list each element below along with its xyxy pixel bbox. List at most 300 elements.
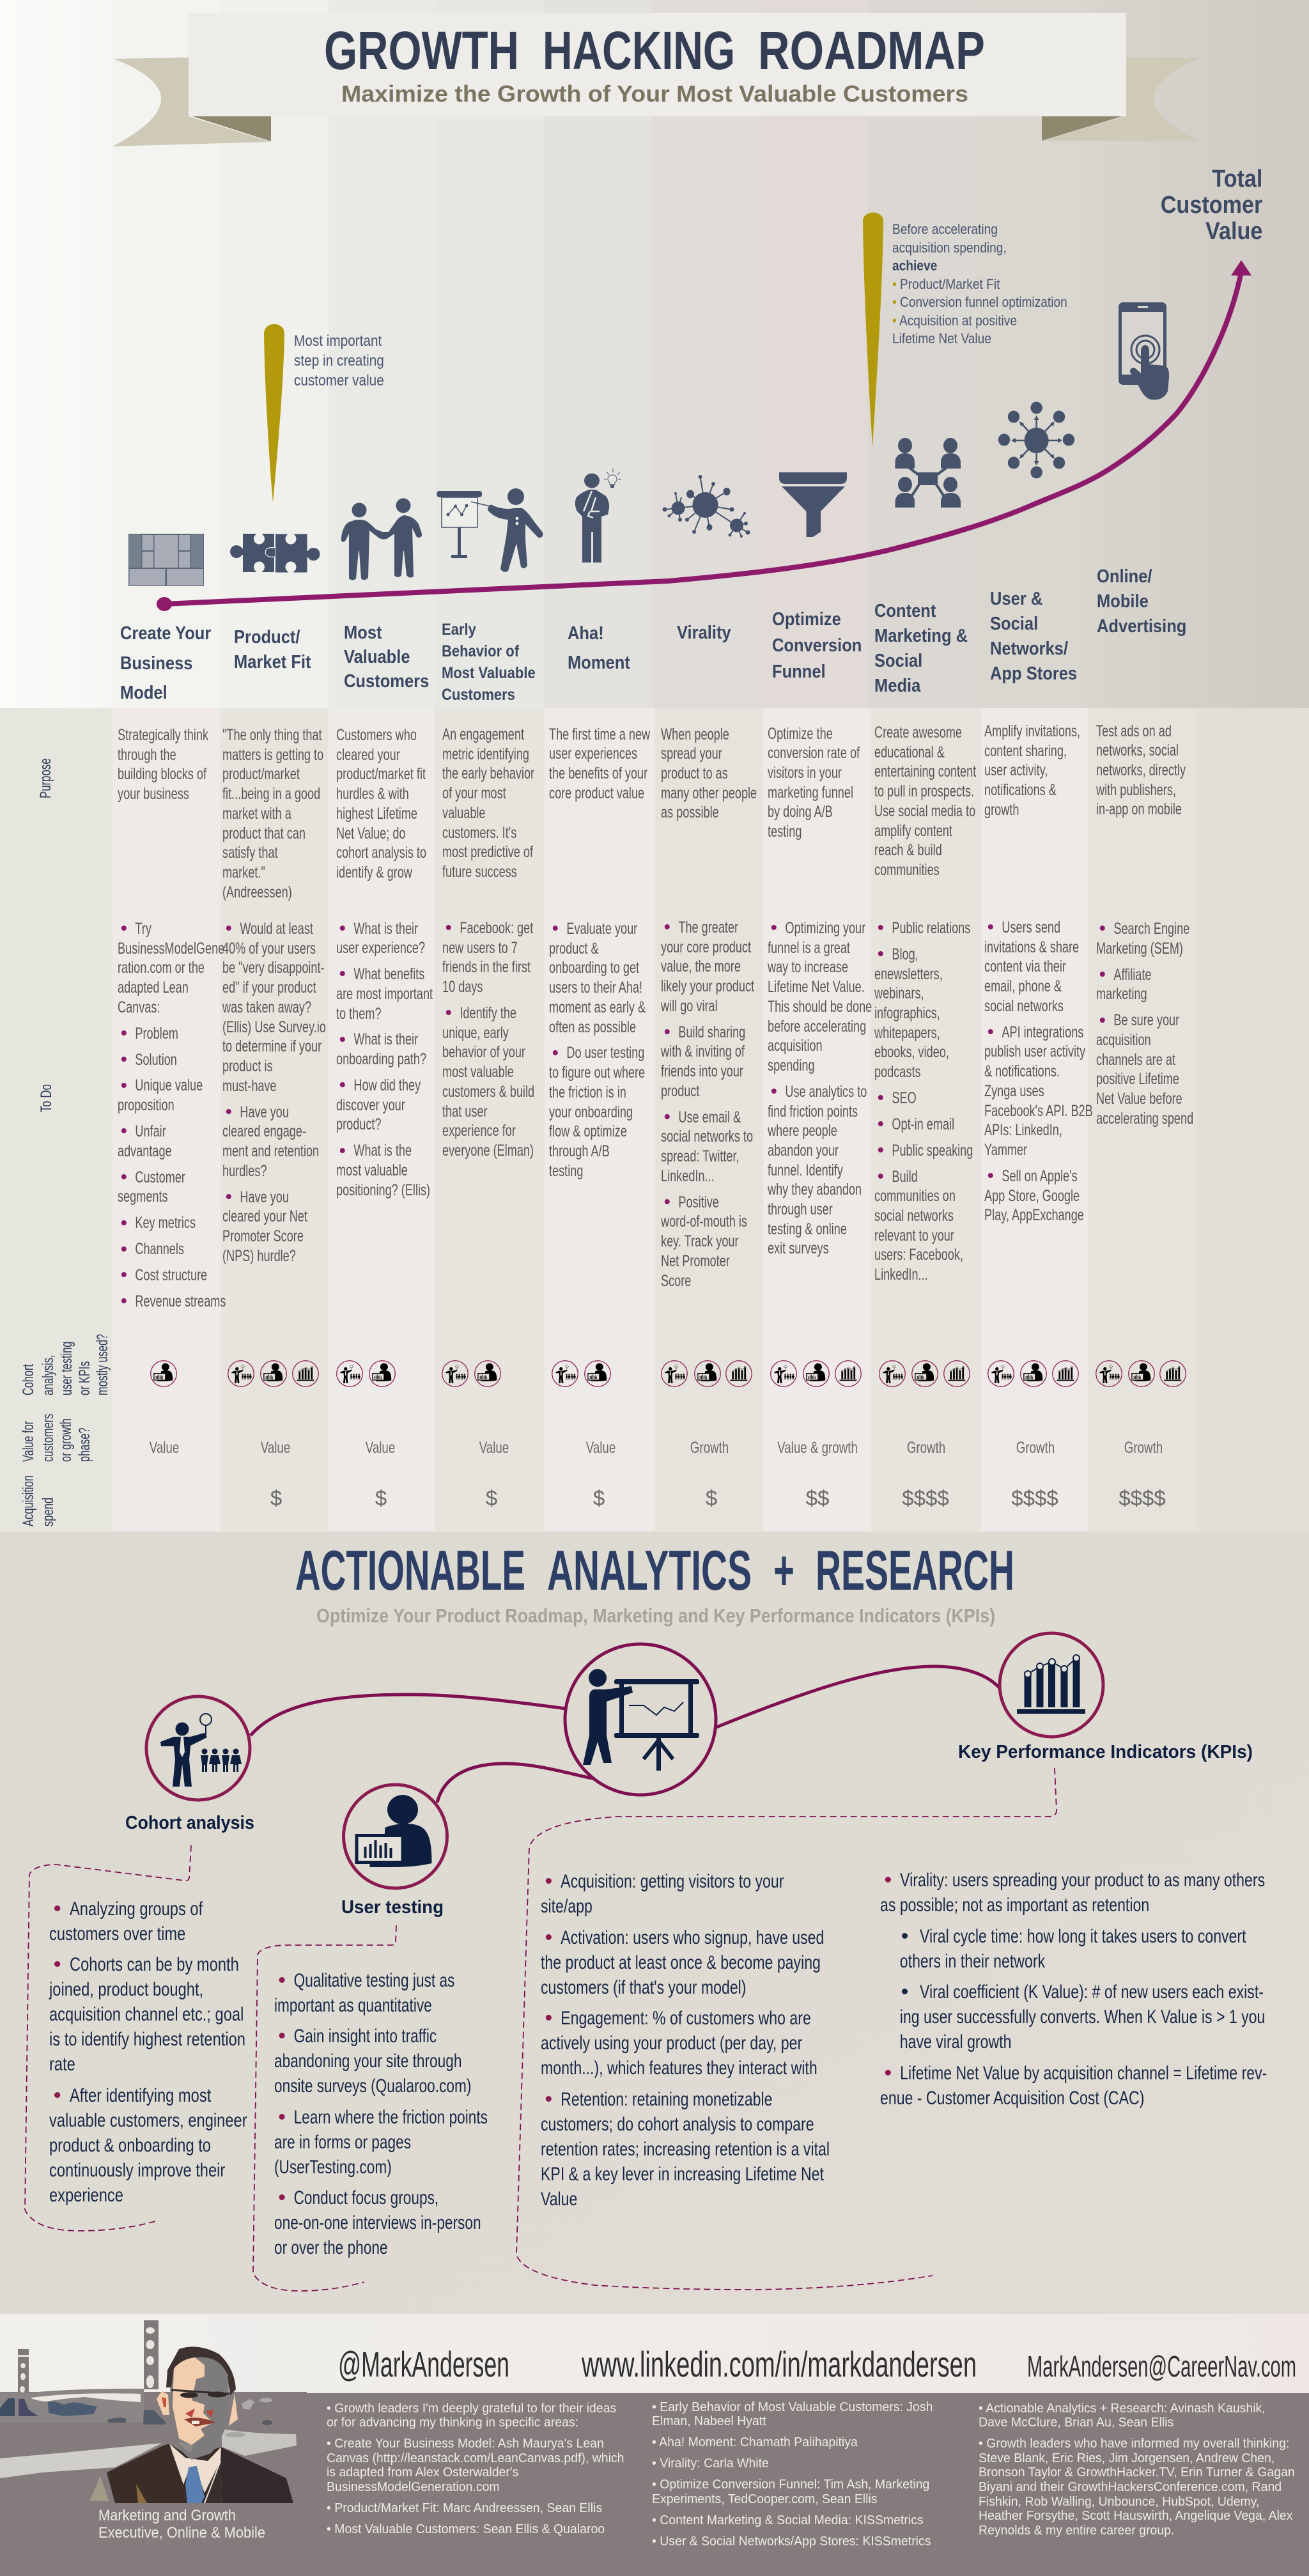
text: KPI bullets left: Value	[541, 2189, 577, 2210]
column 8 purpose: to pull in prospects.	[874, 782, 974, 800]
column 9 to do: social networks	[984, 997, 1064, 1015]
column 9 to do: Yammer	[984, 1141, 1027, 1159]
column 5 purpose: core product value	[549, 784, 644, 802]
column 6 to do: social networks to	[661, 1128, 753, 1145]
column 6 to do	[661, 919, 754, 1290]
heading: early behavior	[442, 621, 536, 704]
column 5 to do: the friction is in	[549, 1083, 626, 1101]
column 2 to do: Have you	[240, 1188, 288, 1206]
column 6 to do: LinkedIn...	[661, 1167, 715, 1185]
credits column 2: • Content Marketing & Social Media: KISSmetrics	[652, 2513, 924, 2527]
text: KPI bullets left: actively using your product (per day, per	[541, 2033, 802, 2054]
column 4 to do: Facebook: get	[460, 919, 533, 937]
text: cohort analysis bullets: Cohorts can be by month	[70, 1954, 239, 1975]
row label: tools used: Cohort	[20, 1364, 37, 1395]
column 8 to do: webinars,	[874, 984, 924, 1002]
column 7 purpose: by doing A/B	[768, 803, 833, 821]
column 2 purpose: product that can	[222, 825, 305, 842]
column 5 to do: to figure out where	[549, 1064, 645, 1082]
column 2 to do: product is	[222, 1057, 272, 1075]
heading: user and social networks	[990, 588, 1077, 684]
column 6 purpose	[661, 725, 757, 821]
heading: online mobile advertising	[1097, 566, 1186, 637]
dashed callout: cohort	[25, 1845, 191, 2231]
column 6 to do: likely your product	[661, 977, 754, 995]
caption: author title: Marketing and Growth	[98, 2507, 236, 2524]
heading: optimize conversion funnel: Funnel	[772, 661, 826, 681]
tool icons row	[151, 1361, 1186, 1386]
text: user testing bullets: Gain insight into traffic	[293, 2026, 437, 2047]
column 6 to do: your core product	[661, 938, 751, 956]
dashed callout: user testing	[253, 1925, 396, 2291]
column 7 to do: testing & online	[768, 1220, 847, 1238]
heading: user and social networks: User &	[990, 588, 1042, 609]
column 3 to do: are most important	[336, 985, 433, 1003]
column 10 to do: accelerating spend	[1096, 1110, 1193, 1128]
subheading: Optimize Your Product Roadmap, Marketing and Key Performance Indicators (KPIs)	[316, 1604, 995, 1627]
text: KPI bullets right: have viral growth	[900, 2031, 1011, 2052]
column 10 to do: Net Value before	[1096, 1090, 1182, 1108]
text: cohort analysis bullets: Analyzing groups of	[70, 1898, 203, 1919]
column 4 purpose: future success	[442, 863, 517, 881]
heading: online mobile advertising: Mobile	[1097, 591, 1149, 611]
callout: before accelerating acquisition: • Acquisition at positive	[892, 312, 1017, 329]
column 3 purpose: Net Value; do	[336, 825, 405, 842]
text: cohort analysis bullets: product & onboarding to	[49, 2135, 211, 2156]
credits column 3: Dave McClure, Brian Au, Sean Ellis	[979, 2415, 1173, 2430]
row label: acquisition spend: Acquisition	[20, 1475, 37, 1526]
text: user testing bullets: Conduct focus groups,	[293, 2187, 438, 2208]
column 5 purpose: The first time a new	[549, 725, 650, 743]
label: user testing: User testing	[341, 1897, 444, 1918]
heading: user and social networks: App Stores	[990, 663, 1077, 684]
callout: before accelerating acquisition	[892, 221, 1067, 346]
column 7 to do: way to increase	[768, 958, 848, 976]
ribbon: right tail	[1042, 58, 1200, 141]
column 4 to do: everyone (Elman)	[442, 1142, 534, 1160]
credits column 1: • Growth leaders I'm deeply grateful to for their ideas	[327, 2401, 616, 2416]
value row: Value	[261, 1439, 290, 1457]
credits column 1: BusinessModelGeneration.com	[327, 2479, 500, 2494]
column 1 to do: Canvas:	[118, 998, 160, 1016]
row label: value or growth: or growth	[58, 1418, 75, 1462]
column 3 purpose: hurdles & with	[336, 785, 409, 803]
column 2 purpose: fit...being in a good	[222, 785, 320, 803]
column 2 to do: to determine if your	[222, 1037, 321, 1055]
illustration: portrait of Mark Andersen	[89, 2347, 293, 2503]
heading: ANALYTICS	[547, 1539, 752, 1602]
column 2 purpose: market."	[222, 864, 265, 881]
spend row: $	[270, 1486, 282, 1510]
column 8 to do: users: Facebook,	[874, 1246, 963, 1264]
callout: before accelerating acquisition: • Product/Market Fit	[892, 276, 1000, 291]
column 6 to do: Score	[661, 1272, 691, 1290]
column 5 to do	[549, 920, 646, 1180]
column 2 to do: ed" if your product	[222, 979, 316, 997]
column 4 purpose: metric identifying	[442, 745, 529, 763]
column 7 purpose	[768, 725, 860, 841]
text: KPI bullets right: as possible; not as important as retention	[880, 1895, 1149, 1916]
callout: before accelerating acquisition: Lifetime Net Value	[892, 330, 991, 346]
column 1 to do: Solution	[135, 1051, 176, 1069]
text: user testing bullets: one-on-one interviews in-person	[274, 2212, 481, 2233]
credits column 1: is adapted from Alex Osterwalder's	[327, 2465, 518, 2479]
title: ROADMAP	[758, 20, 985, 81]
panel: hero roadmap	[0, 0, 1309, 708]
column 3 to do: discover your	[336, 1096, 405, 1114]
column 10 purpose: Test ads on ad	[1096, 722, 1172, 740]
column 6 to do: friends into your	[661, 1062, 743, 1080]
heading: content marketing: Social	[874, 651, 922, 671]
column 4 to do: experience for	[442, 1122, 516, 1140]
column 1 purpose: through the	[118, 746, 176, 764]
column 8 to do: podcasts	[874, 1063, 921, 1081]
text: KPI bullets left: site/app	[541, 1896, 593, 1917]
row label: to do: To Do	[38, 1084, 55, 1112]
column 8 to do: whitepapers,	[874, 1024, 940, 1042]
column 2 to do: cleared engage-	[222, 1122, 306, 1140]
credits column 2: Experiments, TedCooper.com, Sean Ellis	[652, 2492, 878, 2506]
connectors	[251, 1666, 1000, 1803]
text: user testing bullets: are in forms or pages	[274, 2132, 411, 2153]
column 8 to do: communities on	[874, 1187, 956, 1205]
column 7 to do: where people	[768, 1122, 837, 1140]
column 9 to do: invitations & share	[984, 938, 1079, 956]
column 9 purpose: content sharing,	[984, 742, 1067, 760]
row label: value or growth: Value for	[20, 1421, 37, 1462]
column 7 to do: funnel is a great	[768, 939, 850, 957]
column 2 purpose: (Andreessen)	[222, 883, 291, 901]
column 3 to do: What is their	[353, 919, 418, 937]
column 1 to do: segments	[118, 1188, 167, 1206]
column 6 to do: The greater	[678, 919, 738, 936]
column 6 to do: Build sharing	[678, 1023, 745, 1041]
column 10 purpose	[1096, 722, 1186, 818]
column 2 purpose: market with a	[222, 805, 291, 823]
column 10 to do	[1096, 920, 1193, 1128]
column 1 to do: Cost structure	[135, 1266, 207, 1284]
subtitle: Maximize the Growth of Your Most Valuable Customers	[341, 81, 968, 107]
icon: funnel	[779, 472, 847, 537]
column 1 purpose	[118, 726, 208, 803]
column 2 purpose: satisfy that	[222, 844, 277, 862]
value row: Value & growth	[777, 1439, 858, 1457]
credits column 2: Elman, Nabeel Hyatt	[652, 2414, 766, 2428]
column 9 to do: Facebook's API. B2B	[984, 1102, 1093, 1120]
icon: phone with tapping hand	[1119, 302, 1169, 400]
title: GROWTH	[324, 20, 519, 81]
text: user testing bullets	[274, 1967, 488, 2267]
heading: optimize conversion funnel: Conversion	[772, 635, 862, 656]
column 8 purpose: reach & build	[874, 841, 942, 859]
heading: optimize conversion funnel: Optimize	[772, 609, 841, 629]
column 9 to do: & notifications.	[984, 1062, 1060, 1080]
callout: before accelerating acquisition: achieve	[892, 258, 937, 274]
column 10 to do: Be sure your	[1113, 1011, 1179, 1029]
text: user testing bullets: Learn where the friction points	[293, 2107, 488, 2128]
heading: create your business model	[120, 623, 211, 703]
text: cohort analysis bullets: rate	[49, 2054, 75, 2075]
callout: before accelerating acquisition: acquisition spending,	[892, 239, 1007, 256]
column 4 to do: customers & build	[442, 1083, 534, 1101]
value row: Value	[150, 1439, 179, 1457]
spend row: $$$$	[1011, 1486, 1058, 1510]
credits column 3: Heather Forsythe, Scott Hauswirth, Angelique Vega, Alex	[979, 2508, 1292, 2523]
column 8 to do: Opt-in email	[892, 1115, 954, 1133]
column 4 to do: Identify the	[460, 1004, 516, 1022]
panel: actionable analytics	[0, 1532, 1309, 2314]
column 7 to do: exit surveys	[768, 1239, 829, 1257]
text: KPI bullets right: others in their network	[900, 1951, 1045, 1972]
heading: content marketing: Marketing &	[874, 625, 968, 646]
text: user testing bullets: (UserTesting.com)	[274, 2157, 391, 2178]
column 7 purpose: Optimize the	[768, 725, 833, 743]
column 10 purpose: networks, social	[1096, 741, 1179, 759]
column 3 purpose: product/market fit	[336, 765, 426, 783]
icon: user testing	[344, 1785, 447, 1888]
column 4 purpose: customers. It's	[442, 824, 516, 842]
row label: acquisition spend: spend	[40, 1498, 57, 1526]
column 2 to do: must-have	[222, 1077, 276, 1095]
text: user testing bullets: important as quantitative	[274, 1994, 431, 2016]
column 5 to do: Evaluate your	[566, 920, 637, 938]
icon: presenter hub	[565, 1644, 716, 1795]
column 10 purpose: networks, directly	[1096, 761, 1186, 779]
heading: online mobile advertising: Online/	[1097, 566, 1152, 587]
column 8 to do: Public relations	[892, 919, 970, 937]
row label: tools used: analysis,	[40, 1355, 57, 1395]
text: user testing bullets: abandoning your site through	[274, 2051, 461, 2072]
column 6 to do: Use email &	[678, 1108, 741, 1126]
column 5 purpose: the benefits of your	[549, 764, 647, 782]
callout: most important step: Most important	[294, 332, 382, 349]
column 1 to do: Key metrics	[135, 1214, 196, 1232]
text: KPI bullets right: enue - Customer Acquisition Cost (CAC)	[880, 2088, 1144, 2109]
column 8 to do	[874, 919, 973, 1284]
column 6 purpose: When people	[661, 725, 729, 743]
column 9 to do: APIs: LinkedIn,	[984, 1121, 1062, 1139]
value row: Value	[479, 1439, 509, 1457]
icon: puzzle pieces	[230, 532, 320, 573]
text: KPI bullets left: customers (if that's your model)	[541, 1977, 746, 1998]
column 4 purpose: of your most	[442, 784, 506, 802]
callout: most important step: step in creating	[294, 352, 384, 369]
text: KPI bullets right	[880, 1868, 1267, 2116]
row label: value or growth: phase?	[76, 1427, 93, 1462]
column 2 to do: Would at least	[240, 920, 313, 938]
column 4 to do	[442, 919, 534, 1160]
icon: presenter at board	[437, 488, 543, 572]
text: KPI bullets right: Virality: users spreading your product to as many others	[900, 1870, 1265, 1891]
column 6 to do: Net Promoter	[661, 1252, 730, 1270]
credits column 3: Fishkin, Rob Walling, Unbounce, HubSpot, Udemy,	[979, 2494, 1259, 2509]
column 1 to do: adapted Lean	[118, 979, 188, 997]
column 5 to do: onboarding to get	[549, 959, 639, 977]
value row	[150, 1439, 1163, 1457]
spend row: $$	[806, 1486, 829, 1510]
column 4 purpose: most predictive of	[442, 843, 533, 861]
column 5 to do: Do user testing	[566, 1044, 644, 1062]
column 1 to do: advantage	[118, 1142, 171, 1160]
label: total customer value: Total	[1212, 165, 1262, 192]
heading: create your business model: Create Your	[120, 623, 211, 644]
column 7 to do: acquisition	[768, 1037, 823, 1055]
column 8 purpose: educational &	[874, 743, 945, 761]
column 6 to do: Positive	[678, 1193, 719, 1211]
column 9 to do: content via their	[984, 958, 1066, 975]
column 1 to do: Channels	[135, 1240, 183, 1258]
column 1 to do: Try	[135, 920, 151, 938]
column 8 to do: Blog,	[892, 945, 918, 963]
heading: product market fit	[234, 626, 311, 672]
heading: online mobile advertising: Advertising	[1097, 616, 1186, 637]
column 8 to do: LinkedIn...	[874, 1266, 928, 1284]
value row: Value	[366, 1439, 395, 1457]
column 8 to do: social networks	[874, 1207, 954, 1225]
column 4 to do: friends in the first	[442, 958, 531, 976]
heading: optimize conversion funnel	[772, 609, 862, 681]
credits column 1: • Create Your Business Model: Ash Maurya's Lean	[327, 2436, 604, 2451]
text: KPI bullets left: customers; do cohort analysis to compare	[541, 2114, 814, 2135]
column 5 purpose	[549, 725, 651, 802]
heading: most valuable customers: Customers	[344, 671, 429, 692]
credits column 1: or for advancing my thinking in specific areas:	[327, 2415, 578, 2430]
heading: aha moment: Moment	[568, 653, 630, 673]
caption: author title	[98, 2507, 265, 2541]
pin: most important step	[264, 324, 284, 502]
callout: most important step: customer value	[294, 372, 384, 389]
column 4 to do: new users to 7	[442, 939, 518, 957]
text: cohort analysis bullets: experience	[49, 2185, 123, 2206]
column 5 to do: testing	[549, 1162, 583, 1180]
credits column 2	[652, 2400, 933, 2556]
column 2 purpose: matters is getting to	[222, 746, 323, 764]
heading: +	[773, 1539, 794, 1602]
text: cohort analysis bullets: After identifying most	[70, 2085, 211, 2106]
column 3 to do: positioning? (Ellis)	[336, 1181, 430, 1199]
credits column 1	[327, 2401, 624, 2543]
spend row: $$$$	[1119, 1486, 1166, 1510]
icon: cohort analysis	[146, 1696, 250, 1800]
text: cohort analysis bullets: customers over time	[49, 1923, 185, 1944]
text: cohort analysis bullets: joined, product bought,	[49, 1979, 203, 2000]
column 7 purpose: conversion rate of	[768, 744, 860, 762]
column 3 to do: What is the	[353, 1142, 412, 1160]
icon: KPI chart	[1000, 1633, 1103, 1737]
credits column 3	[979, 2401, 1295, 2545]
contact: twitter: @MarkAndersen	[338, 2344, 509, 2384]
column 4 to do: 10 days	[442, 978, 483, 996]
column 9 to do: App Store, Google	[984, 1187, 1080, 1205]
column 1 to do: Customer	[135, 1168, 185, 1186]
icon: virality network	[663, 476, 749, 537]
column 2 to do: Promoter Score	[222, 1227, 303, 1245]
column 1 to do: Problem	[135, 1025, 178, 1043]
text: KPI bullets left: retention rates; increasing retention is a vital	[541, 2139, 830, 2160]
column 5 to do: flow & optimize	[549, 1122, 627, 1140]
column 7 to do: funnel. Identify	[768, 1161, 843, 1179]
column 3 purpose: identify & grow	[336, 864, 412, 881]
text: KPI bullets left: Retention: retaining monetizable	[561, 2089, 773, 2110]
heading: content marketing: Content	[874, 601, 936, 621]
column 10 to do: marketing	[1096, 985, 1147, 1003]
column 9 to do: publish user activity	[984, 1043, 1085, 1060]
column 7 to do: find friction points	[768, 1103, 858, 1121]
spend row: $	[375, 1486, 387, 1510]
spend row: $	[593, 1486, 605, 1510]
column 5 to do: your onboarding	[549, 1103, 633, 1121]
column 8 to do: relevant to your	[874, 1227, 954, 1245]
credits column 3: • Actionable Analytics + Research: Avinash Kaushik,	[979, 2401, 1266, 2416]
text: KPI bullets left: Engagement: % of customers who are	[561, 2008, 811, 2029]
spend row: $$$$	[902, 1486, 949, 1510]
text: user testing bullets: onsite surveys (Qualaroo.com)	[274, 2076, 471, 2097]
column 9 to do: Play, AppExchange	[984, 1206, 1084, 1224]
column 9 purpose: notifications &	[984, 781, 1057, 799]
column 2 to do: was taken away?	[222, 998, 311, 1016]
text: cohort analysis bullets	[49, 1896, 247, 2214]
column 8 purpose: Create awesome	[874, 724, 962, 741]
column 4 to do: that user	[442, 1103, 488, 1121]
column 10 to do: Search Engine	[1113, 920, 1189, 938]
row label: tools used: mostly used?	[94, 1334, 111, 1395]
column 3 to do: most valuable	[336, 1161, 408, 1179]
column 1 to do: BusinessModelGene	[118, 940, 224, 958]
credits column 3: Bronson Taylor & GrowthHacker.TV, Erin Turner & Gagan	[979, 2465, 1295, 2479]
column 3 to do: onboarding path?	[336, 1050, 426, 1068]
column 2 to do: cleared your Net	[222, 1207, 307, 1225]
column 9 to do: Sell on Apple's	[1002, 1167, 1078, 1185]
column 10 purpose: in-app on mobile	[1096, 800, 1182, 818]
label: cohort analysis: Cohort analysis	[125, 1813, 254, 1833]
heading: early behavior: Behavior of	[442, 642, 519, 660]
column 8 to do: SEO	[892, 1089, 917, 1107]
column 9 purpose: Amplify invitations,	[984, 722, 1080, 740]
callout: before accelerating acquisition: Before accelerating	[892, 221, 998, 237]
column 4 to do: behavior of your	[442, 1043, 525, 1061]
column 6 purpose: spread your	[661, 745, 722, 763]
column 1 purpose: Strategically think	[118, 726, 208, 744]
title banner	[189, 13, 1126, 116]
column 2 purpose: "The only thing that	[222, 726, 321, 744]
credits column 2: • Optimize Conversion Funnel: Tim Ash, Marketing	[652, 2477, 929, 2492]
text: KPI bullets right: Lifetime Net Value by acquisition channel = Lifetime rev-	[900, 2063, 1267, 2084]
panel: roadmap table	[0, 708, 1193, 1532]
heading: ACTIONABLE	[295, 1539, 525, 1602]
caption: author title: Executive, Online & Mobile	[98, 2524, 265, 2541]
column 7 to do: This should be done	[768, 998, 872, 1016]
column 9 purpose: user activity,	[984, 761, 1048, 779]
title: HACKING	[543, 20, 735, 81]
value row: Value	[586, 1439, 616, 1457]
panel: footer	[0, 2314, 1309, 2576]
row label: value or growth	[20, 1414, 93, 1462]
text: cohort analysis bullets: is to identify highest retention	[49, 2029, 245, 2050]
heading: aha moment: Aha!	[568, 623, 604, 644]
text: KPI bullets left	[541, 1869, 830, 2217]
column 5 to do: through A/B	[549, 1142, 610, 1160]
text: cohort analysis bullets: acquisition channel etc.; goal	[49, 2004, 244, 2025]
column 1 to do	[118, 920, 226, 1310]
row label: value or growth: customers	[40, 1414, 57, 1462]
column 3 purpose: cleared your	[336, 746, 400, 764]
column 7 purpose: testing	[768, 823, 802, 841]
column 4 purpose: valuable	[442, 804, 486, 822]
column 9 to do: API integrations	[1002, 1023, 1083, 1041]
heading: virality: Virality	[677, 623, 731, 643]
column 7 purpose: visitors in your	[768, 764, 842, 782]
column 7 to do: Lifetime Net Value.	[768, 978, 865, 996]
